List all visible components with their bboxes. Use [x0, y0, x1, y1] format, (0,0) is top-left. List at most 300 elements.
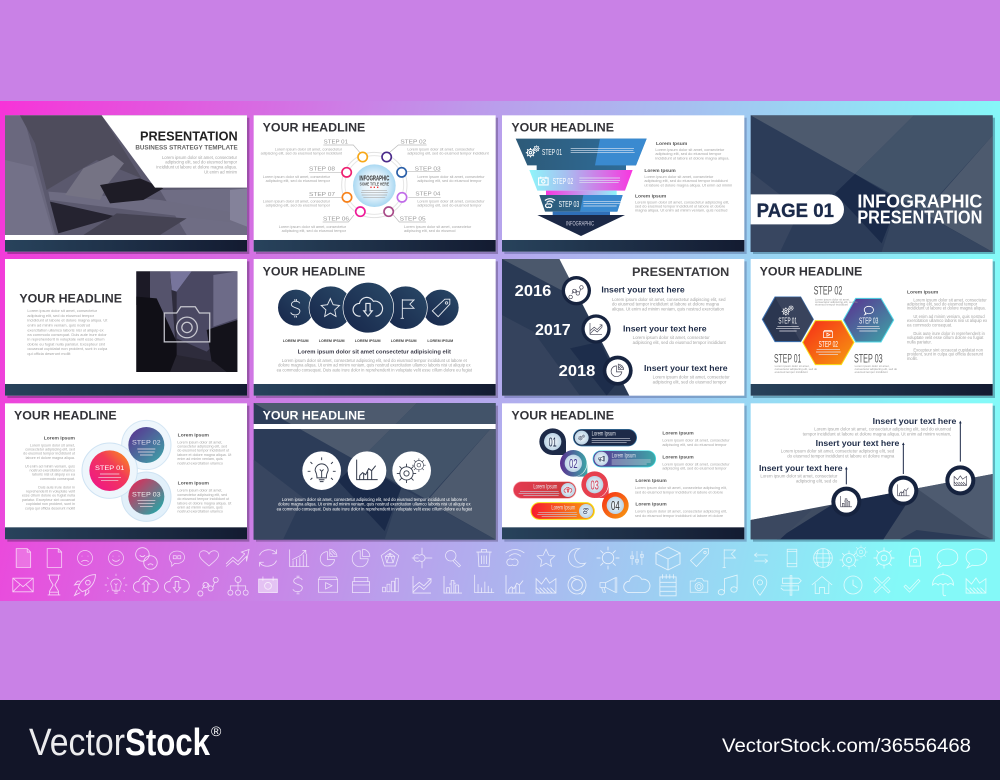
heading: YOUR HEADLINE [263, 264, 365, 278]
timeline text: Lorem ipsum dolor sit amet, consectetur [653, 375, 730, 380]
left text: cupidatat non proident, sunt in [26, 502, 75, 506]
icon: trash [476, 550, 492, 566]
funnel chart: STEP 01 [542, 147, 562, 157]
timeline text: Insert your text here [644, 363, 728, 373]
heading: YOUR HEADLINE [511, 409, 614, 423]
icon: megaphone [600, 578, 617, 592]
hexagon cluster: STEP 03 [859, 317, 879, 326]
funnel descriptions: adipiscing elit, sed do eiusmod tempor incididunt [644, 178, 729, 183]
funnel chart: INFOGRAPHIC [566, 221, 594, 227]
timeline text: Lorem ipsum dolor sit amet, consectetur [633, 335, 710, 340]
right text: do eiusmod tempor incididunt ut [177, 449, 229, 453]
page pill [751, 194, 844, 224]
subtitle: BUSINESS STRATEGY TEMPLATE [135, 145, 238, 152]
milestone text: Lorem ipsum dolor sit amet, consectetur adipiscing elit, sed [781, 448, 895, 453]
icon: chat faces [136, 548, 157, 569]
milestone text: do eiusmod tempor incididunt ut labore et dolore magna [787, 453, 895, 458]
text block: Lorem ipsum dolor sit amet, consectetur [27, 308, 98, 313]
step descriptions: Lorem ipsum dolor sit amet, consectetur [263, 200, 331, 204]
icon: search [446, 550, 460, 567]
arrow tips [845, 421, 962, 469]
icon: cloud upload [133, 576, 158, 592]
icon: music [718, 575, 737, 595]
right text: adipiscing elit, sed do eiusmod tempor [662, 443, 727, 447]
timeline text: Insert your text here [601, 285, 685, 295]
text column: mollit. [907, 356, 918, 361]
right text: sed do eiusmod tempor incididunt ut labore et dolore [635, 490, 723, 494]
icon: arrows [754, 553, 768, 563]
pills: Lorem Ipsum [551, 505, 576, 512]
icon: home [812, 576, 832, 594]
milestone text: Insert your text here [816, 438, 900, 448]
footer bar [751, 384, 993, 396]
timeline text: aliqua. Ut enim ad minim veniam, quis nostrud exercitation [612, 307, 725, 312]
gradient band [0, 101, 1000, 601]
funnel descriptions: ut labore et dolore magna aliqua. Ut enim ad minim [644, 182, 732, 187]
funnel descriptions: incididunt ut labore et dolore magna aliqua. [655, 155, 729, 160]
panel: slide 12 rising milestones [751, 403, 995, 542]
icon: chart up [413, 576, 431, 593]
text block: enim ad minim veniam, quis nostrud [27, 322, 90, 327]
right text: labore et dolore magna aliqua. Ut [177, 501, 231, 505]
text column: Excepteur sint occaecat cupidatat non [913, 348, 984, 353]
text block [277, 497, 473, 511]
icon: check [904, 579, 920, 592]
title: PRESENTATION [140, 130, 238, 144]
footer band [0, 700, 1000, 780]
number pins: 03 [590, 478, 599, 492]
timeline text: Insert your text here [623, 323, 707, 333]
left text: culpa qui officia deserunt mollit [25, 506, 75, 510]
milestone text: Lorem ipsum dolor sit amet, consectetur [760, 473, 838, 478]
milestone text: Insert your text here [759, 463, 843, 473]
icon: growth [290, 550, 309, 566]
icon: globe [814, 549, 832, 567]
left text: nostrud exercitation ullamco [29, 469, 75, 473]
funnel descriptions: Lorem Ipsum [656, 141, 688, 147]
text column: adipiscing elit, sed do eiusmod tempor [907, 301, 978, 306]
right text: Lorem ipsum dolor sit amet, consectetur adipiscing elit, [635, 510, 727, 514]
text column: nulla pariatur. [907, 339, 932, 344]
step descriptions: Lorem ipsum dolor sit amet, consectetur [279, 225, 347, 229]
step descriptions: Lorem ipsum dolor sit amet, consectetur [417, 200, 485, 204]
icon: mail [13, 578, 33, 592]
step notes: Lorem ipsum dolor sit amet, [815, 297, 850, 301]
milestone text: Lorem ipsum dolor sit amet, consectetur adipiscing elit, sed do eiusmod [814, 426, 952, 431]
icon: gears [840, 545, 868, 569]
step notes [775, 297, 898, 374]
icon: heart [199, 551, 219, 566]
text block [27, 308, 108, 356]
step notes: eiusmod tempor incididunt [775, 370, 808, 374]
step notes: eiusmod tempor incididunt [855, 370, 888, 374]
right text: Lorem Ipsum [662, 454, 694, 460]
text block: dolore eu fugiat nulla pariatur. Excepteur sint [27, 341, 106, 346]
step notes: consectetur adipiscing elit, sed do [855, 367, 898, 371]
right text: adipiscing elit, sed do eiusmod tempor [662, 467, 727, 471]
number pins: 01 [549, 435, 557, 449]
icon: x mark [874, 577, 890, 593]
left text: consectetur adipiscing elit, sed [25, 448, 75, 452]
step descriptions: Lorem ipsum dolor sit amet, consectetur [404, 225, 472, 229]
icon: cloud [624, 576, 650, 593]
panel: slide 4 page 01 [751, 115, 995, 254]
right text: labore et dolore magna aliqua. Ut [177, 453, 231, 457]
pills [513, 429, 656, 519]
step descriptions: Lorem ipsum dolor sit amet, consectetur [275, 148, 343, 152]
text column: Duis aute irure dolor in reprehenderit in [913, 331, 986, 336]
icon: small bars [444, 576, 462, 593]
text block: incididunt ut labore et dolore magna aliqua. [156, 165, 237, 170]
icon: tree [228, 576, 248, 595]
left text: pariatur. Excepteur sint occaecat [22, 498, 75, 502]
icon: area [536, 578, 556, 593]
panel: slide 10 dark icons [254, 403, 498, 542]
number pins: 02 [569, 457, 577, 471]
step notes: Lorem ipsum dolor sit amet, [775, 364, 810, 368]
step labels: STEP 02 [400, 140, 426, 146]
step descriptions: adipiscing elit, sed do eiusmod tempor [282, 229, 347, 233]
left text: labore et dolore magna aliqua. [26, 456, 75, 460]
text block: ea commodo consequat. Duis aute irure dolor in reprehenderit in voluptate velit esse cillum dolore eu fugiat [277, 367, 473, 372]
footer bar [254, 384, 496, 396]
white rule [254, 424, 496, 429]
icon: area outline [966, 578, 986, 593]
funnel descriptions: Lorem ipsum dolor sit amet, consectetur adipiscing elit, [635, 199, 729, 204]
circle captions [283, 339, 453, 343]
icon strip [13, 545, 987, 596]
text column: Lorem Ipsum [907, 289, 939, 295]
text block [156, 155, 238, 174]
circle diagram: STEP 03 [132, 491, 161, 498]
text block: dolore magna aliqua. Ut enim ad minim veniam, quis nostrud exercitation ullamco laboris nisi ut aliquip ex [278, 363, 471, 368]
logo: ® [211, 723, 222, 739]
step titles: STEP 01 [774, 351, 802, 365]
text block: Lorem ipsum dolor sit amet, consectetur adipiscing elit, sed do eiusmod tempor incididunt ut labore et [282, 497, 468, 502]
left text: reprehenderit in voluptate velit [26, 490, 75, 494]
left text: Ut enim ad minim veniam, quis [25, 464, 75, 468]
text column: Ut enim ad minim veniam, quis nostrud [913, 314, 985, 319]
text column: exercitation ullamco laboris nisi ut aliquip ex [907, 318, 988, 323]
icon: nodes [198, 577, 218, 596]
funnel descriptions [635, 141, 732, 213]
title: INFOGRAPHIC [857, 191, 982, 212]
icon: orbit [568, 576, 586, 595]
right text: do eiusmod tempor incididunt ut [177, 497, 229, 501]
text column: incididunt ut labore et dolore magna aliqua. [907, 306, 986, 311]
step labels [309, 140, 441, 223]
milestone text: Insert your text here [873, 416, 957, 426]
icon: sad face [78, 550, 92, 566]
right text: Lorem Ipsum [178, 432, 210, 438]
panel: slide 8 hexagons [751, 259, 995, 398]
heading: YOUR HEADLINE [14, 409, 117, 423]
ring diagram: SOME TITLE HERE [360, 181, 389, 186]
ring diagram [309, 145, 441, 222]
years: 2017 [535, 322, 571, 339]
icon: dollar [293, 576, 302, 594]
icon: calendar [259, 576, 277, 593]
left text: esse cillum dolore eu fugiat nulla [22, 494, 76, 498]
number pins [539, 428, 629, 519]
panel: slide 7 timeline [502, 259, 747, 398]
left text: Lorem ipsum dolor sit amet, [30, 443, 75, 447]
icon: phone [787, 549, 797, 567]
timeline text: do eiusmod tempor incididunt ut labore et dolore magna [612, 302, 720, 307]
step titles: STEP 03 [854, 351, 883, 365]
photo: street [136, 271, 237, 372]
circle captions: LOREM IPSUM [319, 339, 345, 343]
page label: PAGE 01 [757, 201, 834, 222]
circle captions: LOREM IPSUM [355, 339, 381, 343]
text block: Ut enim ad minim [204, 169, 237, 174]
icon: video [318, 577, 338, 592]
funnel chart [516, 139, 647, 236]
circle captions: LOREM IPSUM [427, 339, 453, 343]
circle captions: LOREM IPSUM [391, 339, 417, 343]
text block: dolore magna aliqua. Ut enim ad minim veniam, quis nostrud exercitation ullamco laboris nisi ut aliquip ex [278, 502, 471, 507]
footer bar [5, 384, 247, 396]
hexagon cluster: STEP 02 [819, 340, 838, 349]
icon: folder [352, 577, 370, 593]
right text [177, 432, 231, 514]
icon: moon [568, 548, 586, 567]
icon: hourglass [48, 575, 60, 595]
text block: ea commodo consequat. Duis aute irure dolor [27, 332, 107, 337]
logo: Vector [29, 722, 125, 764]
right text: consectetur adipiscing elit, sed [177, 445, 227, 449]
icon: speech [170, 551, 184, 566]
right text: Lorem ipsum dolor sit amet, [177, 440, 222, 444]
text block: adipiscing elit, sed do eiusmod tempor [27, 313, 95, 318]
step descriptions: adipiscing elit, sed do eiusmod tempor [266, 179, 331, 183]
milestone text [759, 416, 957, 483]
funnel descriptions: Lorem Ipsum [644, 168, 676, 174]
icon: pin [753, 576, 767, 595]
right text: Lorem Ipsum [662, 431, 694, 437]
image id: VectorStock.com/36556468 [722, 736, 971, 757]
right text: Lorem ipsum dolor sit amet, consectetur [662, 462, 730, 466]
text block: in reprehenderit in voluptate velit esse cillum [27, 337, 105, 342]
right text: Lorem ipsum dolor sit amet, consectetur adipiscing elit, [635, 486, 727, 490]
photo: hand on laptop [5, 115, 247, 235]
icon: smile [108, 550, 124, 566]
icon: gear [874, 548, 894, 568]
subheading: Lorem ipsum dolor sit amet consectetur adipisicing elit [298, 350, 451, 356]
text column: ea commodo consequat. [907, 322, 952, 327]
years: 2016 [515, 283, 551, 300]
icon: trend [226, 550, 249, 566]
funnel descriptions: Lorem Ipsum [635, 193, 667, 199]
icon: pie slice [352, 549, 370, 567]
text block [277, 358, 473, 372]
pills: Lorem Ipsum [592, 431, 616, 438]
step labels: STEP 07 [309, 192, 335, 198]
timeline text: Lorem ipsum dolor sit amet, consectetur adipiscing elit, sed [612, 297, 726, 302]
footer bar [5, 527, 247, 539]
icon: notes [660, 574, 676, 596]
footer bar [502, 527, 744, 539]
text block: adipiscing elit, sed do eiusmod tempor [165, 160, 238, 165]
icon: star [537, 549, 555, 566]
right text: enim ad minim veniam, quis [177, 505, 223, 509]
icon: radar [381, 549, 399, 566]
icon circles [302, 451, 431, 490]
step descriptions: adipiscing elit, sed do eiusmod tempor incididunt [407, 152, 490, 156]
step descriptions: adipiscing elit, sed do eiusmod tempor [266, 204, 331, 208]
logo [29, 722, 222, 764]
heading: YOUR HEADLINE [263, 121, 365, 135]
icon: rocket [75, 575, 95, 595]
text block: incididunt ut labore et dolore magna aliqua. Ut [27, 318, 108, 323]
text block: ea commodo consequat. Duis aute irure dolor in reprehenderit in voluptate velit esse cillum dolore eu fugiat [277, 506, 473, 511]
heading: YOUR HEADLINE [19, 291, 122, 305]
icon: umbrella [933, 573, 953, 596]
step descriptions: adipiscing elit, sed do eiusmod tempor incididunt [261, 152, 343, 156]
step labels: STEP 04 [415, 192, 440, 198]
circle diagram: STEP 02 [132, 440, 161, 447]
icon: wifi [506, 550, 524, 566]
diagonal panel [751, 474, 993, 539]
step notes: Lorem ipsum dolor sit amet, [855, 364, 890, 368]
icon: document filled [16, 549, 31, 567]
icon: tag [690, 549, 708, 566]
timeline text: adipiscing elit, sed do eiusmod tempor incididunt [633, 340, 727, 345]
hexagon cluster [762, 297, 894, 365]
icon: signpost [781, 576, 801, 595]
left text: do eiusmod tempor incididunt ut [23, 452, 75, 456]
text column: voluptate velit esse cillum dolore eu fugiat [907, 335, 984, 340]
funnel chart: STEP 03 [559, 199, 579, 209]
text column [907, 289, 988, 361]
right text [635, 431, 730, 518]
heading: PRESENTATION [632, 265, 729, 279]
step titles [774, 283, 883, 365]
icon: box [656, 547, 680, 570]
icon: bars [382, 578, 398, 592]
text block: qui officia deserunt mollit [27, 351, 71, 356]
funnel chart: STEP 02 [553, 176, 573, 186]
icon: cloud download [164, 576, 189, 592]
icon: flag [723, 549, 735, 568]
circle diagram [82, 420, 171, 521]
step labels: STEP 03 [415, 167, 441, 173]
right text: sed do eiusmod tempor incididunt ut labore et dolore [635, 514, 723, 518]
circle diagram: STEP 01 [95, 465, 125, 472]
years: 2018 [559, 363, 595, 380]
right text: nostrud exercitation ullamco [177, 461, 223, 465]
step descriptions: Lorem ipsum dolor sit amet, consectetur [417, 175, 485, 179]
text block: Lorem ipsum dolor sit amet, consectetur adipiscing elit, sed do eiusmod tempor incididunt ut labore et [282, 358, 468, 363]
panel: slide 1 presentation cover [5, 115, 249, 254]
footer bar [5, 240, 247, 252]
icon: refresh [260, 550, 276, 566]
step titles: STEP 02 [814, 283, 843, 297]
hexagon cluster: STEP 01 [778, 316, 797, 325]
step notes: consectetur adipiscing elit, sed do [815, 300, 858, 304]
heading: YOUR HEADLINE [511, 121, 614, 135]
number pins: 04 [611, 499, 620, 513]
icon: clock [844, 576, 862, 594]
timeline nodes [562, 276, 633, 386]
panel: slide 6 icon circles [254, 259, 498, 398]
logo: Stock [125, 722, 211, 764]
footer bar [254, 240, 496, 252]
step labels: STEP 08 [309, 167, 335, 173]
pills: Lorem Ipsum [612, 452, 636, 459]
left text: Lorem Ipsum [44, 436, 76, 442]
years [515, 283, 595, 380]
step notes: consectetur adipiscing elit, sed do [775, 367, 818, 371]
panel: slide 3 funnel [502, 115, 747, 254]
diagonal panel [502, 259, 629, 396]
panel: slide 11 numbered pills [502, 403, 747, 542]
right text: Lorem ipsum dolor sit amet, consectetur [662, 439, 730, 443]
step labels: STEP 01 [324, 140, 348, 146]
text block: Lorem ipsum dolor sit amet, consectetur [162, 155, 238, 160]
funnel descriptions: Lorem ipsum dolor sit amet, consectetur [644, 174, 714, 179]
right text: enim ad minim veniam, quis [177, 457, 223, 461]
step labels: STEP 06 [323, 217, 349, 223]
timeline text: adipiscing elit, sed do eiusmod tempor [653, 380, 727, 385]
icon: lock [910, 548, 920, 566]
icon: camera [164, 307, 210, 342]
left text: laboris nisi ut aliquip ex ea [32, 473, 76, 477]
text block: occaecat cupidatat non proident, sunt in culpa [27, 346, 108, 351]
milestone nodes [831, 465, 975, 517]
step descriptions: Lorem ipsum dolor sit amet, consectetur [263, 175, 331, 179]
icon: document [47, 549, 62, 567]
icon: chat bubble outline [966, 549, 987, 568]
text column: proident, sunt in culpa qui officia deserunt [907, 352, 984, 357]
right text: Lorem Ipsum [178, 481, 210, 487]
panel: slide 9 three circles [5, 403, 249, 542]
right text: Lorem Ipsum [635, 502, 667, 508]
icon: sliders [631, 551, 643, 565]
circle captions: LOREM IPSUM [283, 339, 309, 343]
milestone text: tempor incididunt ut labore et dolore magna aliqua. Ut enim ad minim veniam, [803, 431, 951, 436]
circle row [278, 282, 459, 333]
timeline text [601, 285, 730, 385]
heading: YOUR HEADLINE [760, 264, 862, 278]
text column: Lorem ipsum dolor sit amet, consectetur [913, 297, 987, 302]
step descriptions: Lorem ipsum dolor sit amet, consectetur [407, 148, 475, 152]
funnel descriptions: adipiscing elit, sed do eiusmod tempor [655, 151, 722, 156]
step descriptions [261, 148, 490, 233]
footer bar [502, 240, 744, 252]
right text: nostrud exercitation ullamco [177, 510, 223, 514]
left text [22, 436, 76, 510]
funnel descriptions: magna aliqua. Ut enim ad minim veniam, quis nostrud [635, 208, 727, 213]
icon: bars axis [475, 575, 494, 593]
right text: Lorem Ipsum [635, 478, 667, 484]
milestone text: adipiscing elit, sed do [796, 478, 838, 483]
icon: crosshair [412, 548, 432, 568]
heading: YOUR HEADLINE [263, 409, 365, 423]
ring diagram: INFOGRAPHIC [359, 175, 389, 182]
arrows [846, 422, 960, 484]
icon: chat bubble [937, 549, 958, 568]
step labels: STEP 05 [400, 217, 426, 223]
icon: line chart [506, 575, 525, 593]
funnel descriptions: Lorem ipsum dolor sit amet, consectetur [655, 147, 725, 152]
title: PRESENTATION [857, 206, 982, 227]
step notes: eiusmod tempor incididunt [815, 303, 848, 307]
right text: Lorem ipsum dolor sit amet, [177, 489, 222, 493]
icon: camera [690, 579, 708, 592]
funnel descriptions: sed do eiusmod tempor incididunt ut labore et dolore [635, 203, 725, 208]
step descriptions: adipiscing elit, sed do eiusmod [404, 229, 455, 233]
